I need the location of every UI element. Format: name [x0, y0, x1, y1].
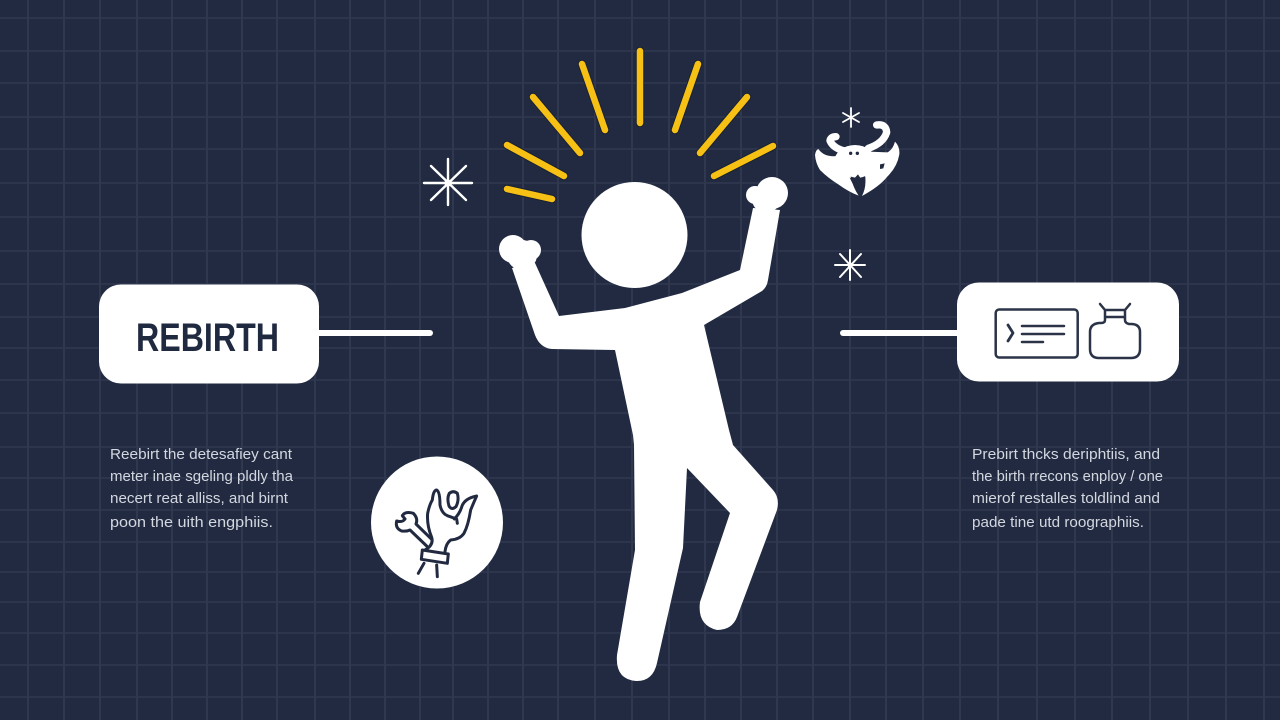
text block: left description: necert reat alliss, and birnt: [110, 491, 288, 507]
icon: hand and wrench badge: [371, 456, 503, 588]
text block: right description: [972, 447, 1163, 531]
text block: right description: mierof restalles toldlind and: [972, 491, 1160, 507]
icon: sparkle left: [424, 159, 472, 205]
heading: REBIRTH: REBIRTH: [136, 316, 279, 360]
panel: icon card with connector: [843, 282, 1179, 382]
panel: rebirth label with connector: [99, 284, 430, 384]
text block: left description: meter inae sgeling pldly tha: [110, 469, 294, 485]
text block: right description: Prebirt thcks deriphtiis, and: [972, 447, 1160, 463]
icon: sparkle lower right: [835, 250, 865, 280]
text block: left description: poon the uith engphiis.: [110, 515, 273, 531]
icon: sparkle top right: [843, 108, 859, 127]
icon card: right: [957, 282, 1179, 382]
body and limbs: [512, 208, 780, 681]
figure: celebrating stick person: [499, 177, 788, 681]
text block: right description: the birth rrecons enploy / one: [972, 469, 1163, 485]
label box: left: [99, 284, 319, 384]
icon: terminal window: [996, 310, 1078, 358]
fist: right: [746, 177, 788, 213]
connector line: left: [315, 330, 430, 336]
text block: left description: [110, 447, 294, 531]
fist: left: [499, 235, 541, 270]
text block: left description: Reebirt the detesafiey cant: [110, 447, 292, 463]
connector line: right: [843, 330, 960, 336]
icon: jar: [1090, 304, 1140, 358]
text block: right description: pade tine utd roographiis.: [972, 515, 1144, 531]
head: [582, 182, 688, 288]
icon: horned creature: [815, 125, 899, 196]
icon: rays of light: [507, 51, 773, 199]
